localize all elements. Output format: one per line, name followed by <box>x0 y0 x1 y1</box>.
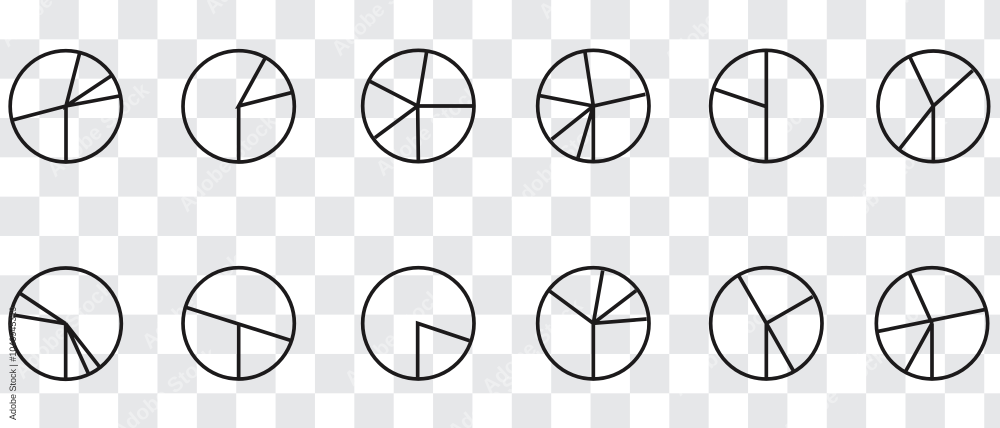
watermarks: Adobe Stock <box>830 133 938 241</box>
watermarks: Adobe Stock <box>138 249 248 354</box>
pie icon row 1 no 2: three slices <box>183 51 294 163</box>
watermarks: Adobe Stock <box>10 276 118 384</box>
watermarks: Adobe Stock <box>43 79 154 182</box>
pie icon row 1 no 1: five slices <box>10 51 121 163</box>
pie icon row 1 no 5: three slices <box>711 50 822 163</box>
watermarks: Adobe Stock <box>504 109 612 217</box>
watermarks: Adobe Stock <box>371 81 485 181</box>
watermarks: Adobe Stock <box>340 283 448 391</box>
watermarks: Adobe Stock <box>823 294 933 399</box>
pie icon row 2 no 1: five slices <box>10 268 121 379</box>
stock id caption: Adobe Stock | #1040945329 <box>8 307 18 420</box>
watermarks: Adobe Stock <box>668 298 779 401</box>
pie icon row 1 no 3: five slices <box>363 50 474 162</box>
pie icon row 2 no 5: four slices <box>711 268 822 379</box>
watermarks: Adobe Stock <box>705 98 816 201</box>
pie icon row 1 no 4: six slices <box>538 50 649 162</box>
pie icon row 2 no 3: two slices <box>363 268 474 379</box>
pie icon row 1 no 6: four slices <box>878 51 989 162</box>
watermarks: Adobe Stock <box>174 109 282 217</box>
pie icon row 2 no 2: three slices <box>183 268 294 379</box>
pie icon row 2 no 6: five slices <box>876 268 988 379</box>
watermarks: Adobe Stock <box>478 294 588 399</box>
watermarks: Adobe Stock <box>844 109 952 217</box>
pie icon row 2 no 4: five slices <box>538 268 649 379</box>
